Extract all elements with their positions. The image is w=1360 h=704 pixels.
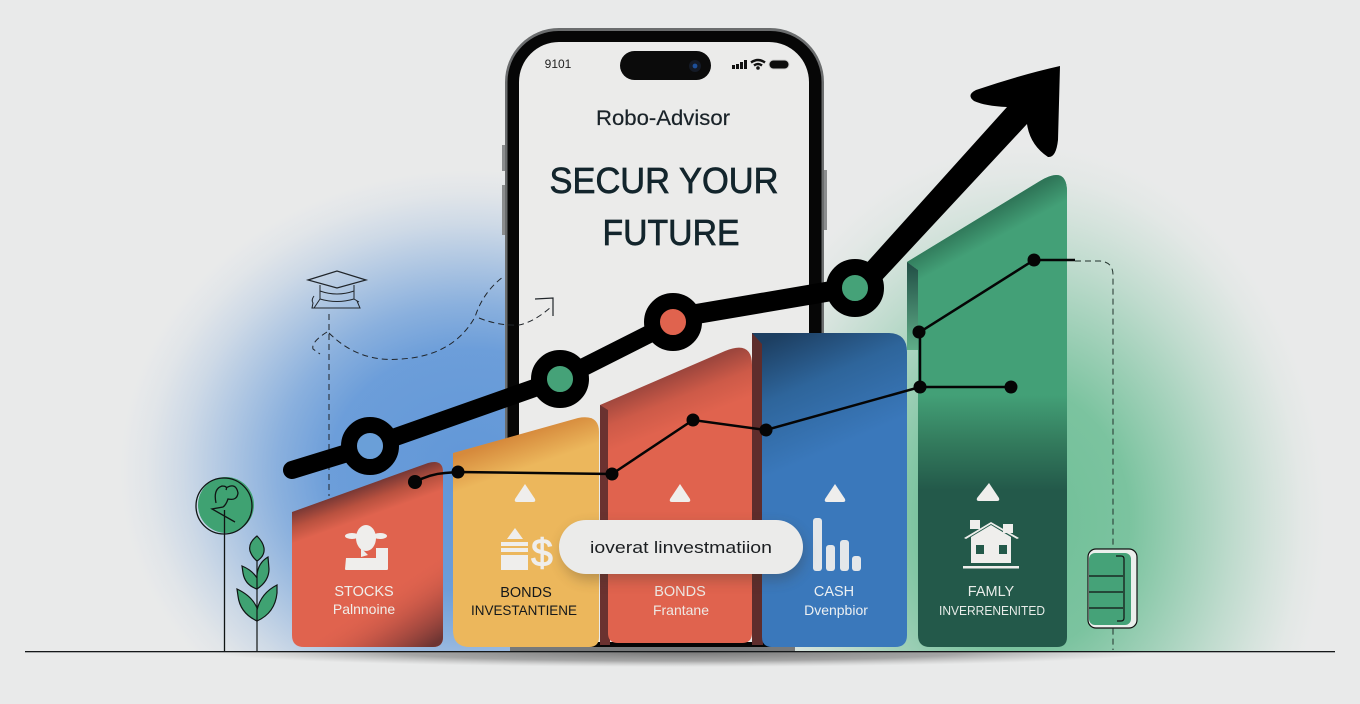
bar: bonds yellow xyxy=(453,417,599,647)
phone status bar: 9101 xyxy=(545,57,572,71)
background: colour washes xyxy=(148,180,1296,651)
marker: green node xyxy=(834,267,876,309)
label: stocks xyxy=(333,584,395,617)
label: bonds: Frantane xyxy=(653,602,709,618)
icon: cash bars xyxy=(813,518,861,571)
phone status bar xyxy=(545,51,789,80)
ground line xyxy=(25,651,1335,652)
label: family xyxy=(939,584,1045,618)
icon: triangle up xyxy=(825,484,845,502)
bar: family xyxy=(907,175,1067,647)
label: bonds xyxy=(471,585,577,618)
dashed connector xyxy=(1075,261,1113,650)
phone headline xyxy=(550,160,778,253)
phone xyxy=(502,28,827,651)
icon: triangle up xyxy=(977,483,999,501)
icon: house xyxy=(963,520,1019,568)
arrow head and shaft xyxy=(862,66,1060,282)
pill label xyxy=(559,520,804,580)
main growth arrow xyxy=(292,66,1060,470)
label: stocks: STOCKS xyxy=(334,584,394,600)
label: bonds: BONDS xyxy=(654,584,706,600)
label: cash: Dvenpbior xyxy=(804,602,868,618)
icon: triangle up xyxy=(515,484,535,502)
icon: stocks xyxy=(345,525,388,570)
label: bonds: BONDS xyxy=(500,585,552,601)
thin line chart xyxy=(408,254,1075,489)
icon: device xyxy=(1088,549,1137,628)
pill label: ioverat linvestmatiion xyxy=(590,538,772,557)
phone headline: FUTURE xyxy=(602,212,740,253)
phone headline: SECUR YOUR xyxy=(550,160,778,201)
icon: tree xyxy=(196,477,254,651)
bar: bonds red xyxy=(600,348,752,645)
marker: green node xyxy=(539,358,581,400)
icon: sprout xyxy=(237,536,277,651)
icon: graduation cap with dashed path xyxy=(308,271,553,496)
ground shadow xyxy=(243,652,1117,666)
label: stocks: Palnnoine xyxy=(333,601,395,617)
icon: triangle up xyxy=(670,484,690,502)
icon: bond and dollar xyxy=(501,528,553,575)
bar: cash xyxy=(752,333,907,647)
label: bonds xyxy=(653,584,709,618)
marker: red node xyxy=(652,301,694,343)
phone title: Robo-Advisor xyxy=(596,107,730,130)
label: family: FAMLY xyxy=(968,584,1015,600)
label: bonds: INVESTANTIENE xyxy=(471,602,577,618)
marker: blue node xyxy=(349,425,391,467)
label: cash xyxy=(804,584,868,618)
label: cash: CASH xyxy=(814,584,854,600)
label: family: INVERRENENITED xyxy=(939,603,1045,618)
icon: bond and dollar: $ xyxy=(531,532,553,575)
bar: stocks xyxy=(292,462,443,647)
